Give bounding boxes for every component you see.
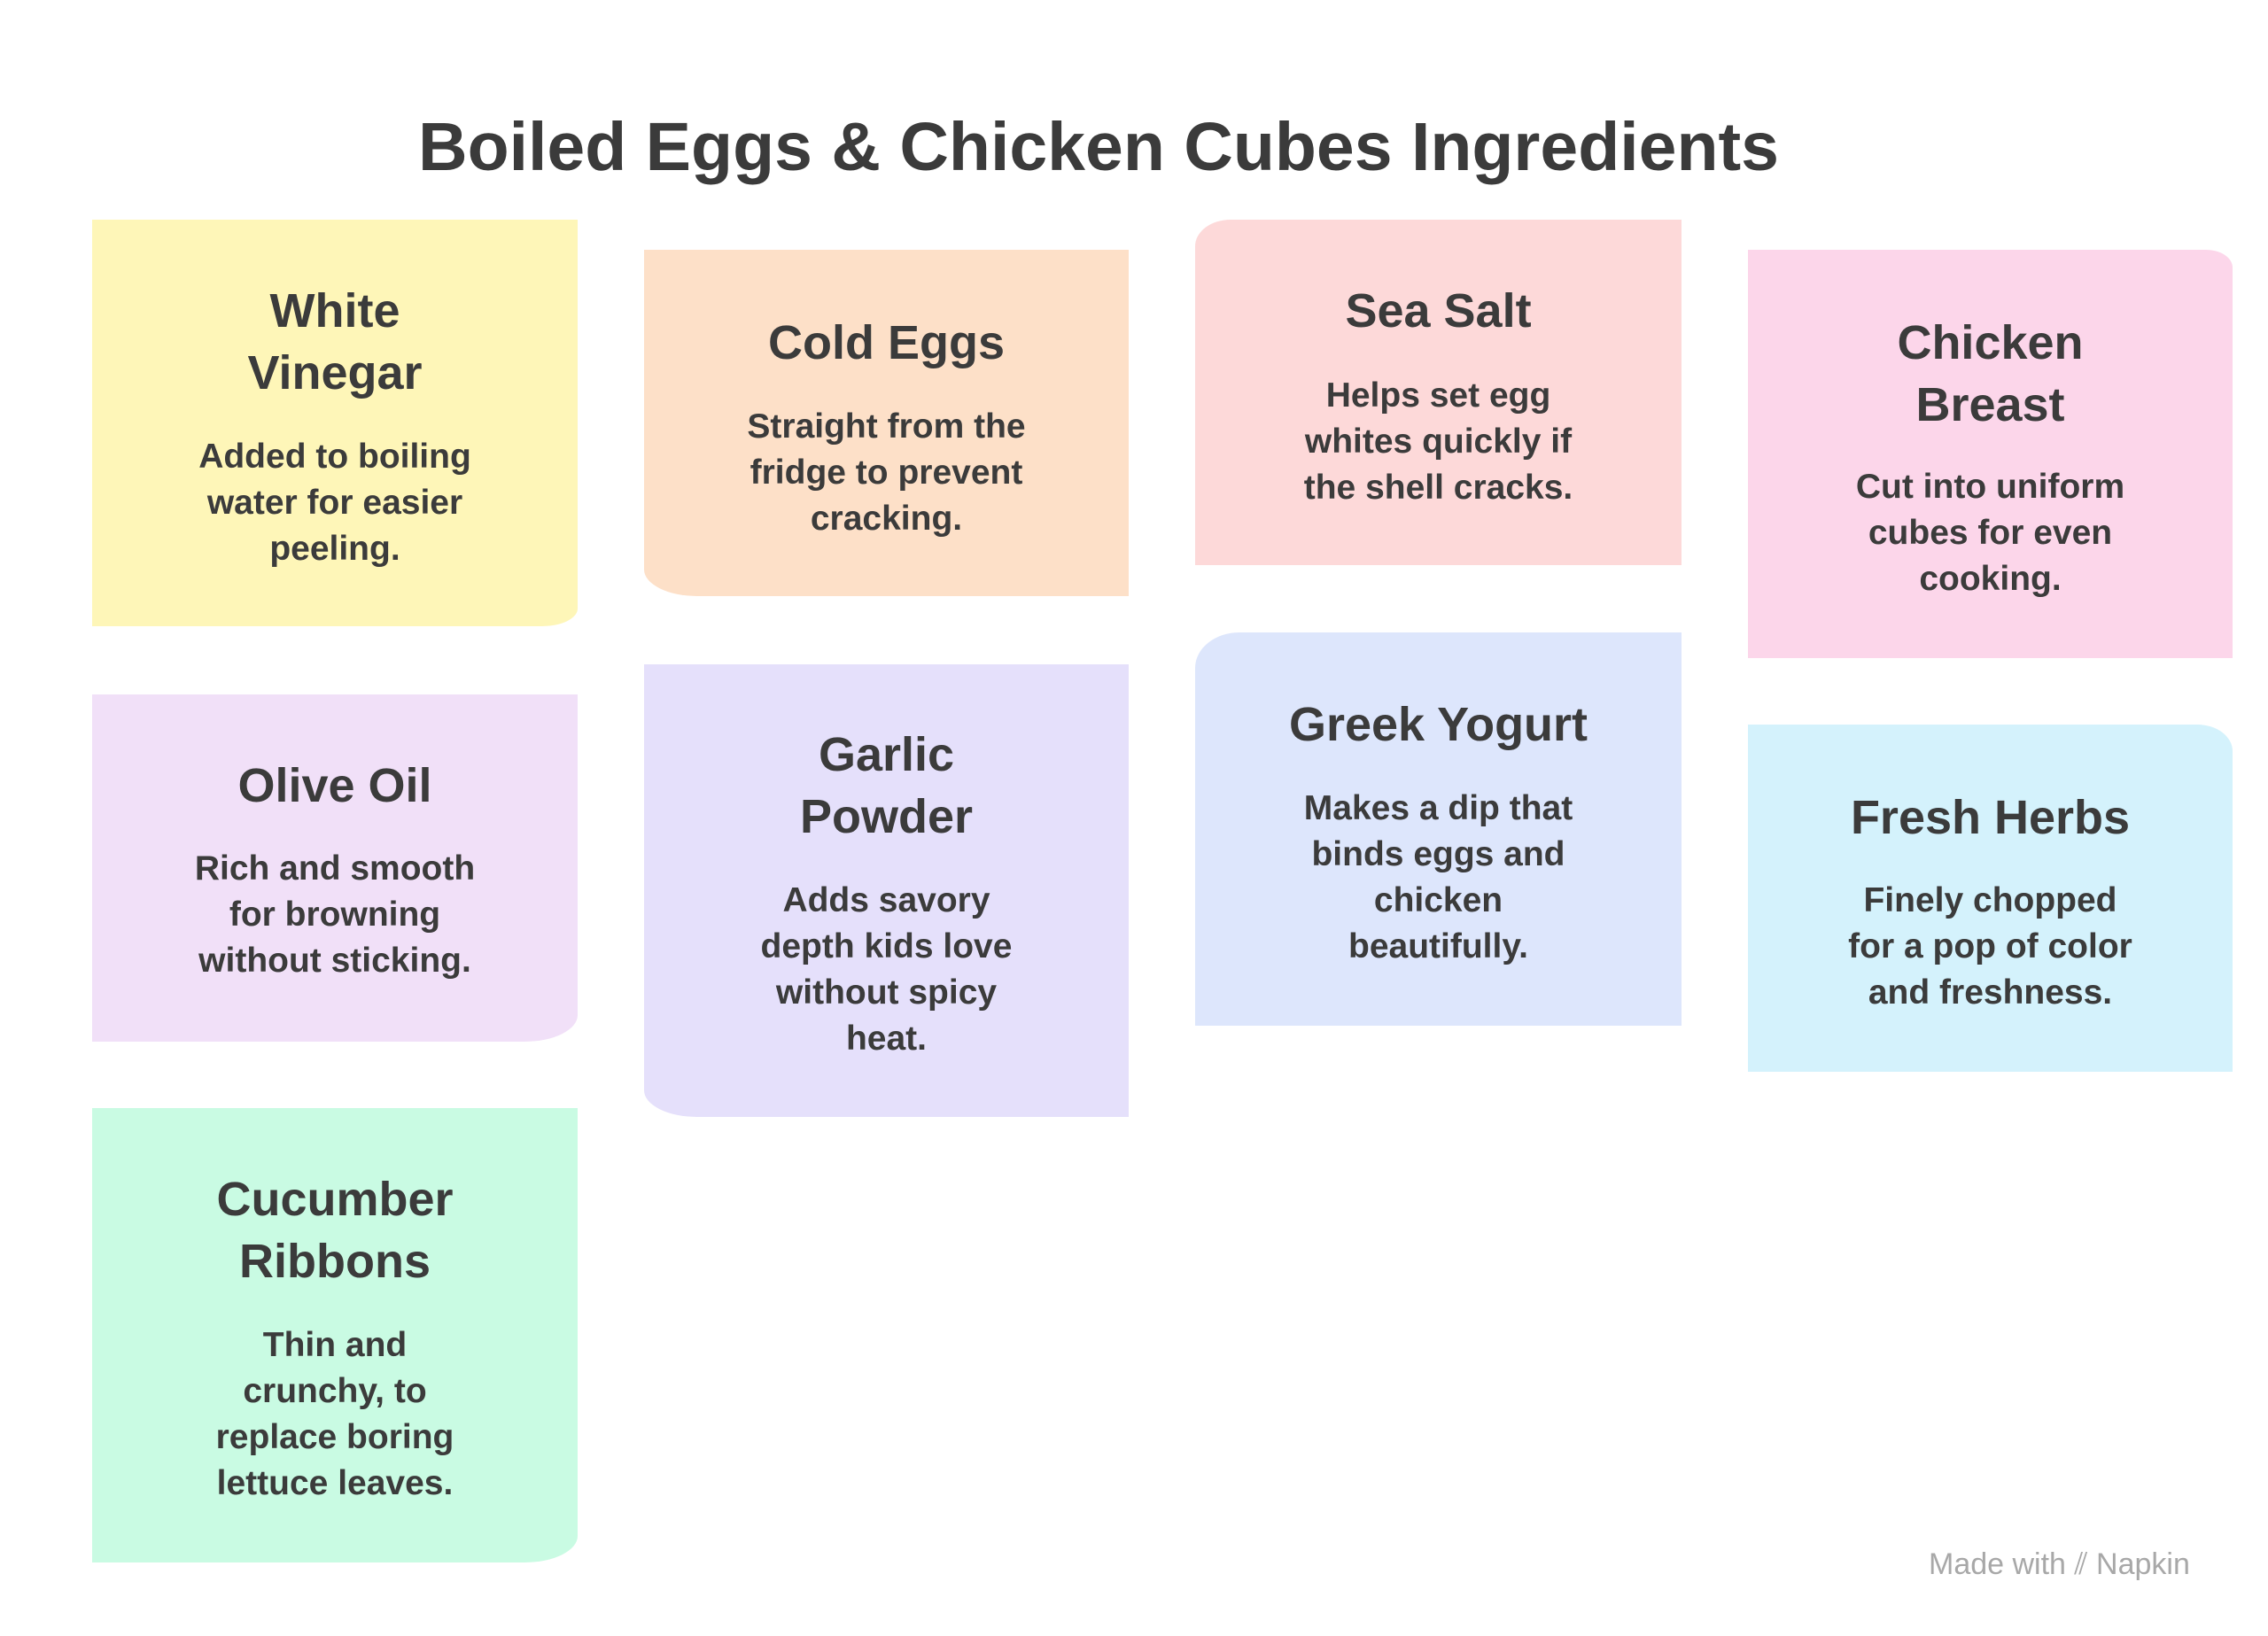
text: cucumber ribbons bbox=[216, 1326, 454, 1502]
panel: white vinegar bbox=[92, 220, 578, 626]
text: sea salt: Helps set egg bbox=[1326, 376, 1550, 415]
text: olive oil: Rich and smooth bbox=[195, 849, 475, 888]
panel: olive oil bbox=[92, 694, 578, 1042]
heading: chicken breast: Chicken bbox=[1897, 316, 2084, 369]
text: garlic powder: depth kids love bbox=[761, 927, 1012, 965]
text: cucumber ribbons: replace boring bbox=[216, 1418, 454, 1456]
text: cold eggs: Straight from the bbox=[747, 407, 1026, 446]
footer: made with napkin: Made with ⫽ Napkin bbox=[1929, 1547, 2190, 1581]
heading: garlic powder: Powder bbox=[800, 790, 973, 843]
text: sea salt bbox=[1304, 376, 1573, 507]
heading: cold eggs: Cold Eggs bbox=[768, 316, 1005, 369]
text: cucumber ribbons: Thin and bbox=[263, 1326, 407, 1364]
title: Boiled Eggs & Chicken Cubes Ingredients bbox=[418, 109, 1779, 185]
heading: cucumber ribbons: Cucumber bbox=[216, 1173, 454, 1226]
text: white vinegar: Added to boiling bbox=[198, 438, 471, 476]
text: greek yogurt: binds eggs and bbox=[1311, 835, 1565, 873]
text: fresh herbs: for a pop of color bbox=[1848, 927, 2132, 965]
heading: sea salt: Sea Salt bbox=[1345, 284, 1532, 337]
heading: cucumber ribbons: Ribbons bbox=[239, 1235, 431, 1288]
panel: greek yogurt bbox=[1195, 632, 1682, 1026]
heading: greek yogurt: Greek Yogurt bbox=[1289, 698, 1588, 751]
heading: cucumber ribbons bbox=[216, 1173, 454, 1288]
panel: cucumber ribbons bbox=[92, 1108, 578, 1562]
heading: white vinegar: Vinegar bbox=[247, 346, 423, 399]
text: white vinegar: water for easier bbox=[207, 484, 462, 522]
text: olive oil: for browning bbox=[229, 896, 440, 934]
text: sea salt: whites quickly if bbox=[1305, 423, 1572, 461]
text: greek yogurt: chicken bbox=[1374, 881, 1503, 919]
text: garlic powder: heat. bbox=[846, 1020, 927, 1058]
heading: chicken breast: Breast bbox=[1915, 378, 2065, 431]
text: cold eggs bbox=[747, 407, 1026, 538]
panel: chicken breast bbox=[1748, 250, 2233, 658]
panel: cold eggs bbox=[644, 250, 1129, 596]
text: white vinegar bbox=[198, 438, 471, 568]
text: cold eggs: fridge to prevent bbox=[750, 454, 1022, 492]
text: chicken breast: Cut into uniform bbox=[1856, 468, 2124, 506]
heading: chicken breast bbox=[1897, 316, 2084, 431]
text: olive oil bbox=[195, 849, 475, 980]
text: fresh herbs: Finely chopped bbox=[1863, 881, 2117, 919]
text: fresh herbs: and freshness. bbox=[1868, 973, 2112, 1012]
heading: fresh herbs: Fresh Herbs bbox=[1851, 791, 2130, 844]
text: chicken breast: cubes for even bbox=[1868, 514, 2112, 552]
heading: garlic powder bbox=[800, 728, 973, 843]
text: greek yogurt: Makes a dip that bbox=[1304, 789, 1573, 827]
heading: white vinegar: White bbox=[269, 284, 400, 337]
text: white vinegar: peeling. bbox=[269, 530, 400, 568]
heading: garlic powder: Garlic bbox=[819, 728, 954, 781]
text: olive oil: without sticking. bbox=[198, 942, 471, 980]
text: garlic powder: Adds savory bbox=[782, 881, 990, 919]
text: chicken breast: cooking. bbox=[1919, 560, 2062, 598]
text: cucumber ribbons: lettuce leaves. bbox=[217, 1464, 453, 1502]
text: cold eggs: cracking. bbox=[811, 500, 962, 538]
text: chicken breast bbox=[1856, 468, 2124, 598]
panel: garlic powder bbox=[644, 664, 1129, 1117]
text: greek yogurt: beautifully. bbox=[1348, 927, 1528, 965]
text: cucumber ribbons: crunchy, to bbox=[243, 1372, 427, 1410]
heading: olive oil: Olive Oil bbox=[237, 759, 432, 812]
heading: white vinegar bbox=[247, 284, 423, 399]
panel: fresh herbs bbox=[1748, 725, 2233, 1072]
panel: sea salt bbox=[1195, 220, 1682, 565]
text: garlic powder: without spicy bbox=[776, 973, 997, 1012]
text: greek yogurt bbox=[1304, 789, 1573, 965]
text: sea salt: the shell cracks. bbox=[1304, 469, 1573, 507]
text: garlic powder bbox=[761, 881, 1012, 1058]
text: fresh herbs bbox=[1848, 881, 2132, 1012]
